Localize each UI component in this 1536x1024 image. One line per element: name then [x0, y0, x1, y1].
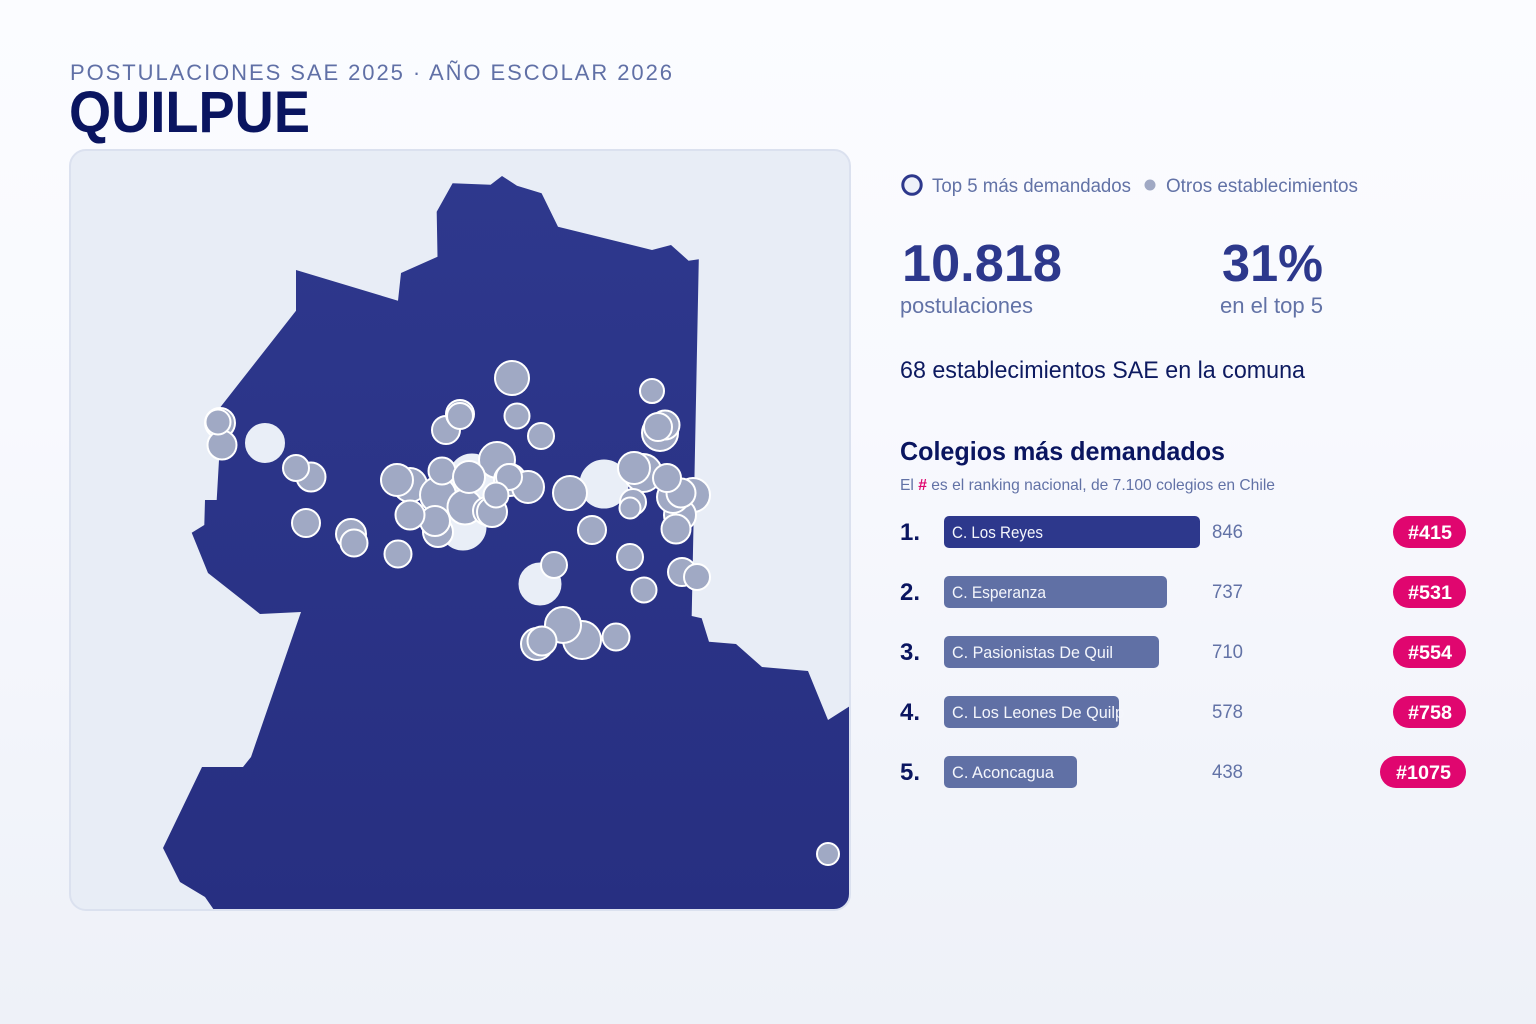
stat: top 5 share: en el top 5: [1220, 293, 1323, 318]
ranking row 1: #415: [1408, 523, 1452, 544]
ranking note: El # es el ranking nacional, de 7.100 colegios en Chile: [900, 477, 1275, 494]
map: top 5 markers: [246, 424, 628, 605]
ranking row 3: C. Pasionistas De Quil: [952, 643, 1113, 662]
ranking row 5: 438: [1212, 762, 1243, 783]
ranking row 1: 846: [1212, 522, 1243, 543]
stat: top 5 share: [1220, 235, 1323, 318]
stat: applications: postulaciones: [900, 293, 1033, 318]
icon: other dot: [1144, 180, 1156, 190]
ranking row 5: #1075: [1396, 763, 1451, 784]
ranking heading: Colegios más demandados: [900, 436, 1225, 466]
map: other establishment markers: [205, 361, 839, 865]
ranking row 4: [900, 696, 1466, 728]
establishments count: 68 establecimientos SAE en la comuna: [900, 357, 1306, 384]
ranking row 5: 5.: [900, 759, 920, 786]
ranking row 3: #554: [1408, 643, 1452, 664]
map: commune shape: [163, 176, 850, 910]
ranking row 2: 737: [1212, 582, 1243, 603]
infographic canvas: [69, 60, 1466, 911]
ranking row 4: 578: [1212, 702, 1243, 723]
ranking row 1: C. Los Reyes: [952, 523, 1043, 542]
legend label: others: Otros establecimientos: [1166, 176, 1358, 197]
stat: applications: 10.818: [902, 235, 1062, 293]
ranking row 5: [900, 756, 1466, 788]
icon: top 5 ring: [903, 176, 921, 194]
legend: [903, 176, 1358, 197]
ranking row 5: C. Aconcagua: [952, 763, 1055, 782]
ranking row 1: [900, 516, 1466, 548]
stat: top 5 share: 31%: [1222, 235, 1323, 293]
ranking row 3: 710: [1212, 642, 1243, 663]
legend label: top 5: Top 5 más demandados: [932, 176, 1131, 197]
ranking row 1: 1.: [900, 519, 920, 546]
ranking row 4: C. Los Leones De Quilp: [952, 703, 1124, 722]
ranking row 3: 3.: [900, 639, 920, 666]
ranking row 2: 2.: [900, 579, 920, 606]
panel: map: [70, 150, 850, 910]
ranking row 2: C. Esperanza: [952, 583, 1046, 602]
ranking row 4: #758: [1408, 703, 1452, 724]
title: QUILPUE: [69, 80, 310, 145]
ranking row 4: 4.: [900, 699, 920, 726]
stat: applications: [900, 235, 1062, 318]
ranking row 2: #531: [1408, 583, 1452, 604]
eyebrow heading: POSTULACIONES SAE 2025 · AÑO ESCOLAR 2026: [70, 60, 672, 85]
ranking row 2: [900, 576, 1466, 608]
ranking row 3: [900, 636, 1466, 668]
